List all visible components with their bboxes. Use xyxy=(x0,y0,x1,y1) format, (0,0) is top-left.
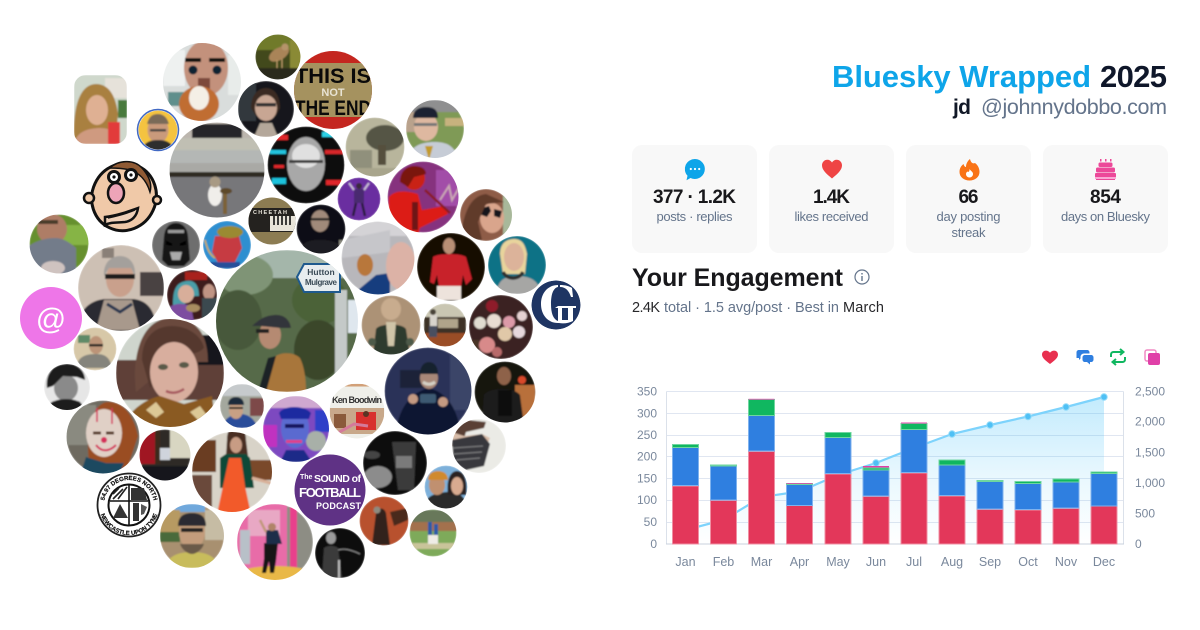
avatar: black and white pint glass xyxy=(363,431,427,495)
right axis labels: 2,000 xyxy=(1135,414,1165,428)
stat card: days on Bluesky: 854 xyxy=(1090,187,1121,208)
right axis labels: 0 xyxy=(1135,537,1142,551)
left axis labels: 350 xyxy=(637,384,657,398)
month labels: Oct xyxy=(1018,555,1038,569)
left axis labels: 0 xyxy=(650,537,657,551)
stacked bars xyxy=(672,399,1117,544)
avatar: man with road sign (largest): Mulgrave xyxy=(305,278,338,287)
avatar: man in black t-shirt at night xyxy=(474,362,536,425)
avatar: Ken Boodwin album: Ken Boodwin xyxy=(332,395,382,405)
engagement summary: total · 1.5 avg/post · Best in xyxy=(664,300,839,316)
icon: heart xyxy=(822,160,842,178)
left axis labels: 150 xyxy=(637,472,657,486)
avatar: man with striped face mask xyxy=(452,419,506,473)
avatar: cartoon head xyxy=(81,153,167,241)
avatar: this is not the end: THE END xyxy=(295,97,371,120)
month labels: Aug xyxy=(941,555,963,569)
avatar: 54.97 Degrees North badge: 54.97 DEGREES NORTH xyxy=(100,476,158,500)
avatar: The Sound of Football podcast: SOUND of xyxy=(314,473,362,485)
icon: legend replies xyxy=(1076,350,1094,364)
avatar: man with glasses indoors xyxy=(78,245,164,331)
icon: flame xyxy=(960,159,980,180)
icon: legend quotes xyxy=(1145,350,1160,365)
avatar: pink mention icon: @ xyxy=(36,303,66,336)
chart grid and axes xyxy=(666,392,1124,544)
avatar: man with glasses on dark background xyxy=(238,81,294,137)
avatar: man with road sign (largest): Hutton xyxy=(307,267,335,277)
avatar: glitch face xyxy=(268,126,344,204)
avatar: man with road sign (largest) xyxy=(214,250,359,392)
stat card: day posting streak: 66 xyxy=(958,187,978,208)
avatar: older man on dark background xyxy=(296,204,346,254)
avatar: roses painting xyxy=(469,295,533,359)
avatar: man in cap at cricket ground xyxy=(406,100,465,162)
stat card: posts and replies: 377 · 1.2K xyxy=(653,187,736,208)
stat card: likes received: likes received xyxy=(794,209,868,224)
avatar: red art with figure xyxy=(360,496,408,546)
avatar: 54.97 Degrees North badge: NEWCASTLE UPON TYNE xyxy=(100,513,158,536)
left axis labels xyxy=(637,384,657,551)
avatar: woman with fringe xyxy=(116,318,224,430)
avatar: black and white performer xyxy=(315,528,365,580)
avatar: cricket field xyxy=(410,510,458,556)
avatar: bird xyxy=(255,34,302,80)
avatar: this is not the end: THIS IS xyxy=(295,65,371,88)
avatar: puppet figure xyxy=(362,296,420,355)
avatar: Darth Vader xyxy=(152,221,200,269)
engagement summary: March xyxy=(843,300,884,316)
icon: birthday cake xyxy=(1095,159,1116,180)
avatar: blonde woman with headphones on teal xyxy=(488,236,546,294)
avatar: red painted face xyxy=(203,221,251,269)
month labels: Feb xyxy=(713,555,734,569)
month labels: Jul xyxy=(906,555,922,569)
left axis labels: 200 xyxy=(637,450,657,464)
avatar: Cheetah synth xyxy=(248,197,296,245)
icon: chat bubble xyxy=(685,159,705,180)
avatar: engraving xyxy=(346,118,406,178)
cumulative line xyxy=(686,394,1107,530)
month labels: Sep xyxy=(979,555,1001,569)
left axis labels: 250 xyxy=(637,428,657,442)
month labels: Apr xyxy=(790,555,809,569)
avatar: woman with red drink xyxy=(74,75,127,144)
avatar: this is not the end: NOT xyxy=(321,87,345,99)
stat card: likes received: 1.4K xyxy=(813,187,850,208)
month labels: Nov xyxy=(1055,555,1078,569)
month labels: Jun xyxy=(866,555,886,569)
heading: your engagement: Your Engagement xyxy=(632,264,844,292)
avatar: singer in red xyxy=(388,162,460,236)
avatar: woman in orange dress xyxy=(192,432,272,512)
avatar: bald man eating bun xyxy=(163,43,241,121)
avatar: blue-haired woman and man xyxy=(167,270,217,322)
month labels: Jan xyxy=(675,555,696,569)
cumulative area xyxy=(686,397,1104,544)
avatar: man taking mirror photo xyxy=(384,348,474,440)
chart legend icons xyxy=(1042,349,1160,365)
stat card: posts and replies xyxy=(632,145,757,253)
stat card: likes received xyxy=(769,145,894,253)
left axis labels: 300 xyxy=(637,406,657,420)
avatar cluster xyxy=(20,34,580,580)
stat card: day posting streak: day posting xyxy=(936,209,1000,224)
avatar: smiling couple xyxy=(424,466,468,510)
avatar: man with blue ring and yellow background xyxy=(138,110,178,152)
avatar: Cheetah synth: CHEETAH xyxy=(253,210,287,216)
avatar: man resting chin on hand xyxy=(74,328,116,370)
avatar: man in red football shirt xyxy=(417,233,485,301)
left axis labels: 100 xyxy=(637,493,657,507)
avatar: this is not the end xyxy=(294,51,372,129)
month labels xyxy=(675,555,1115,569)
avatar: selfie with ginger cat xyxy=(342,222,416,295)
right axis labels xyxy=(1135,384,1165,551)
avatar: Guardian G logo xyxy=(532,280,580,330)
right axis labels: 1,500 xyxy=(1135,446,1165,460)
avatar: psychedelic face xyxy=(263,396,331,462)
avatar: The Sound of Football podcast xyxy=(294,454,366,526)
handle line: @johnnydobbo.com xyxy=(981,95,1167,119)
avatar: clown make-up woman xyxy=(66,400,140,477)
engagement summary: 2.4K xyxy=(632,300,660,316)
title: 2025 xyxy=(1100,59,1167,94)
month labels: Dec xyxy=(1093,555,1115,569)
avatar: 54.97 Degrees North badge xyxy=(96,472,162,538)
right axis labels: 500 xyxy=(1135,506,1155,520)
title: Bluesky Wrapped xyxy=(832,59,1091,94)
engagement chart xyxy=(637,384,1165,569)
engagement summary xyxy=(632,300,884,316)
avatar: Ken Boodwin album xyxy=(330,384,384,438)
right axis labels: 2,500 xyxy=(1135,384,1165,398)
stat card: days on Bluesky: days on Bluesky xyxy=(1061,209,1150,224)
avatar: The Sound of Football podcast: PODCAST xyxy=(316,501,362,511)
month labels: Mar xyxy=(751,555,772,569)
avatar: man in grey shirt on grass xyxy=(29,214,90,275)
stat card: day posting streak: streak xyxy=(952,225,986,240)
icon: info xyxy=(855,270,869,284)
stat card: posts and replies: posts · replies xyxy=(656,209,733,224)
avatar: man in pink dollhouse xyxy=(237,504,313,582)
stat card: days on Bluesky xyxy=(1043,145,1168,253)
avatar: woman with sunglasses xyxy=(460,189,513,241)
avatar: bearded man in yellow shirt xyxy=(160,504,225,568)
avatar: black and white man xyxy=(44,364,90,414)
avatar: The Sound of Football podcast: The xyxy=(300,474,313,481)
stat card: day posting streak xyxy=(906,145,1031,253)
avatar: man in cap with crowd xyxy=(220,384,264,428)
avatar: The Sound of Football podcast: FOOTBALL xyxy=(299,485,361,500)
icon: legend reposts xyxy=(1111,349,1125,365)
avatar: red door interior xyxy=(139,430,192,482)
avatar: cat on Downing Street xyxy=(169,122,265,222)
right axis labels: 1,000 xyxy=(1135,476,1165,490)
avatar: pink mention icon xyxy=(20,287,82,349)
avatar: man on sofa xyxy=(424,304,466,347)
left axis labels: 50 xyxy=(644,515,657,529)
icon: legend likes xyxy=(1042,351,1058,364)
handle line: jd xyxy=(952,96,971,119)
month labels: May xyxy=(826,555,851,569)
avatar: purple player xyxy=(338,178,380,220)
